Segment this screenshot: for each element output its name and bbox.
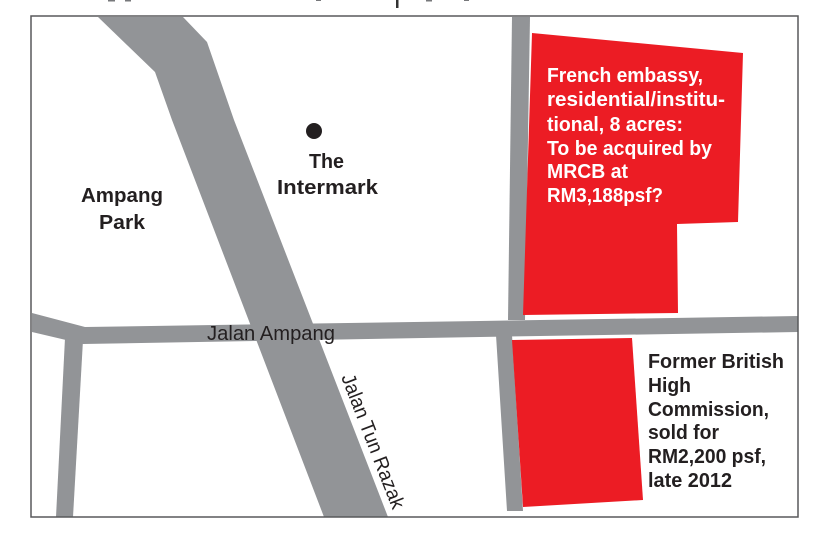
label: The Intermark: The: [309, 151, 344, 173]
road: upper right street: [508, 17, 530, 320]
callout: former British High Commission: late 2012: [648, 470, 732, 492]
label: Ampang Park: [81, 185, 163, 234]
callout: former British High Commission: [648, 351, 784, 492]
label: Ampang Park: Park: [99, 212, 146, 234]
callout: French embassy: tional, 8 acres:: [547, 114, 683, 136]
label: Jalan Ampang: Jalan Ampang: [207, 323, 335, 345]
callout: former British High Commission: Commission,: [648, 399, 769, 421]
label: Ampang Park: Ampang: [81, 185, 163, 207]
red plot: French embassy: [523, 33, 743, 315]
callout: French embassy: To be acquired by: [547, 138, 713, 160]
label: Jalan Tun Razak: Jalan Tun Razak: [336, 371, 409, 513]
label: The Intermark: [277, 151, 379, 199]
callout: French embassy: residential/institu-: [547, 89, 725, 111]
road: left side street: [56, 338, 83, 517]
callout: French embassy: RM3,188psf?: [547, 185, 663, 207]
red plot: former British High Commission: [512, 338, 643, 507]
callout: French embassy: MRCB at: [547, 161, 628, 183]
callout: former British High Commission: Former British: [648, 351, 784, 373]
icon: Intermark location dot: [306, 123, 322, 139]
callout: French embassy: French embassy,: [547, 65, 703, 87]
callout: former British High Commission: sold for: [648, 422, 719, 444]
road: Jalan Tun Razak: [98, 17, 388, 517]
callout: former British High Commission: RM2,200 psf,: [648, 446, 766, 468]
cropped heading descenders: [108, 0, 469, 8]
road: Jalan Ampang: [32, 313, 798, 344]
road: lower right street: [496, 335, 523, 511]
callout: French embassy: [547, 65, 725, 207]
label: The Intermark: Intermark: [277, 177, 379, 199]
callout: former British High Commission: High: [648, 375, 691, 397]
